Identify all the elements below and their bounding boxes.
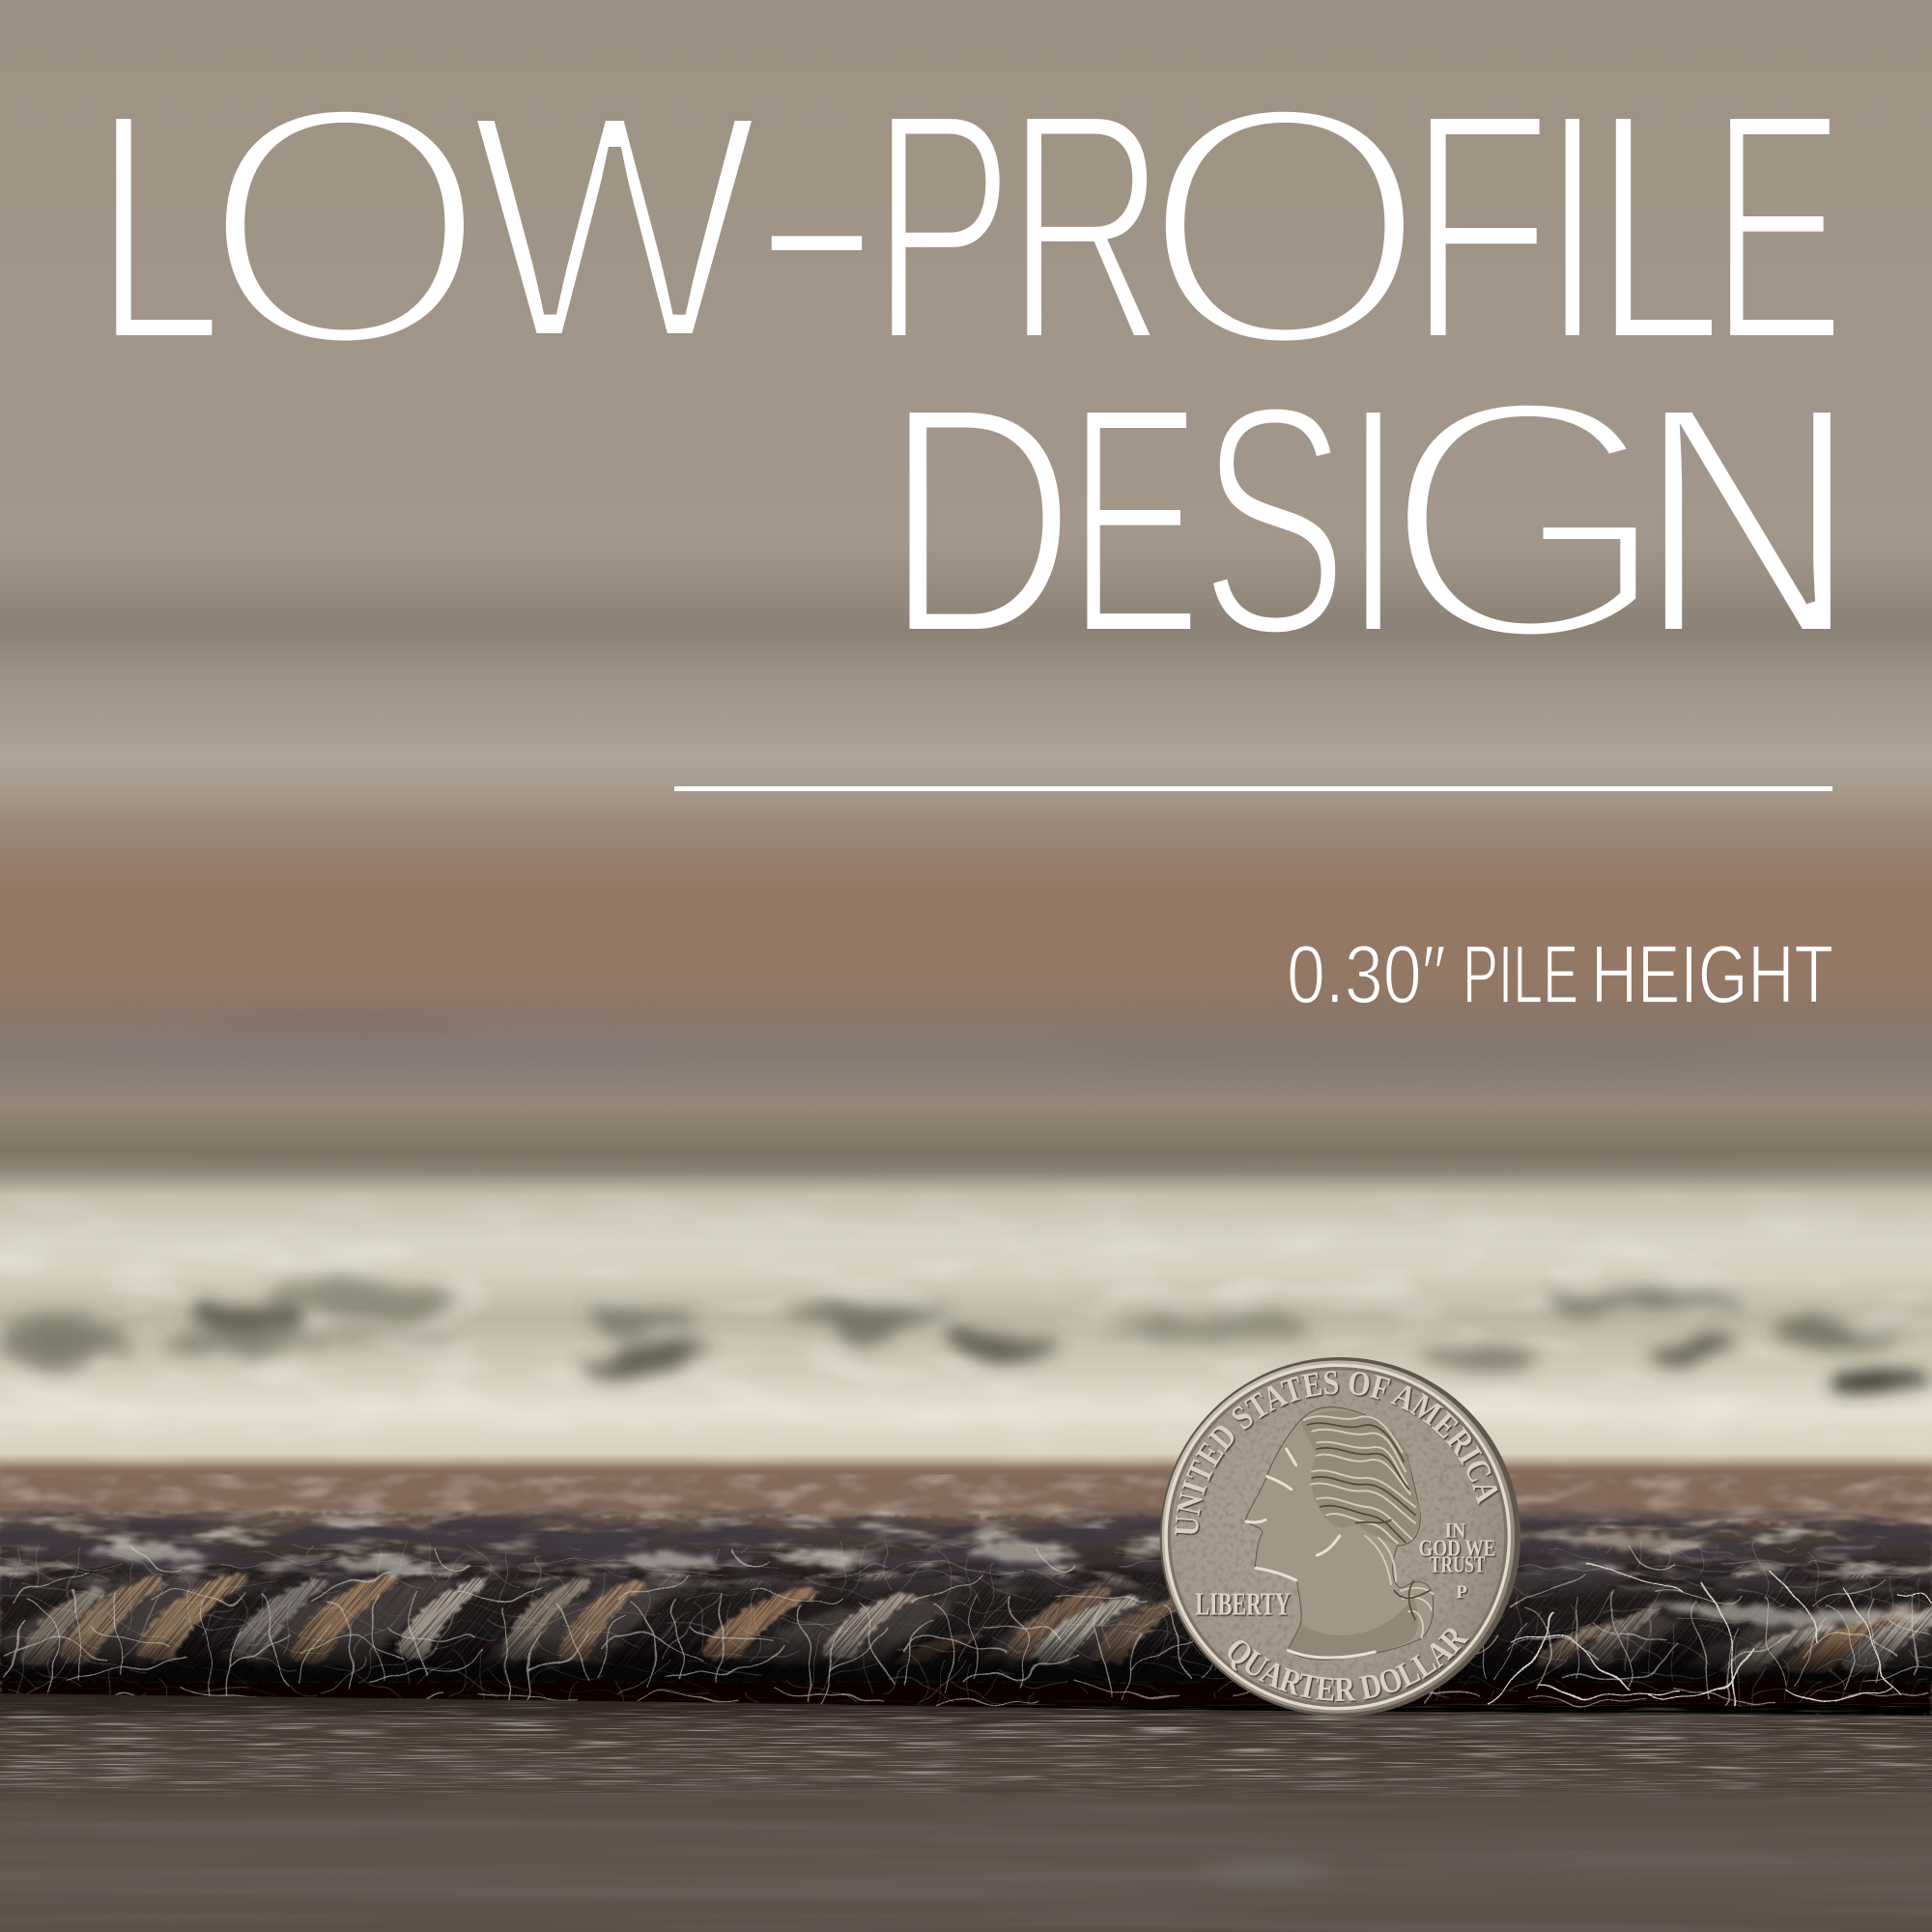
coin inscriptions: GOD WE xyxy=(1418,1537,1495,1562)
light fibre highlights xyxy=(87,1532,1932,1626)
braided rope edge of the rug xyxy=(0,1502,1932,1718)
subheading: pile height: 0.30″ xyxy=(1287,929,1446,1021)
title line 1: - xyxy=(745,34,889,401)
title line 1: F xyxy=(1407,43,1552,411)
title: LOW-PROFILE DESIGN xyxy=(94,33,1861,712)
title line 1: I xyxy=(1543,43,1603,411)
second layer of stray fibres xyxy=(0,1546,1932,1700)
title line 1: R xyxy=(1006,43,1167,411)
coin inscriptions xyxy=(1195,1519,1495,1623)
title line 2: I xyxy=(1343,337,1404,704)
rug pattern: blurred dark motifs xyxy=(0,1286,1932,1397)
title line 2: G xyxy=(1380,327,1672,712)
coin inscriptions: P xyxy=(1456,1582,1467,1603)
coin inscriptions: LIBERTY xyxy=(1195,1587,1291,1623)
broad grey strand masses xyxy=(0,1582,1932,1666)
strand bottom shading xyxy=(0,1584,1932,1681)
twisted strands xyxy=(19,1574,1932,1676)
title line 2: N xyxy=(1635,337,1861,704)
title line 1: P xyxy=(871,43,1014,411)
coin lettering around rim xyxy=(1175,1371,1499,1703)
wood floor xyxy=(0,1693,1932,1932)
subheading: pile height: HEIGHT xyxy=(1591,929,1833,1021)
title line 1: O xyxy=(200,33,490,418)
upper braid: mottled grey wool xyxy=(0,1502,1932,1599)
bust shading xyxy=(1288,1597,1418,1659)
title line 2: E xyxy=(1067,337,1202,704)
divider rule xyxy=(674,786,1833,791)
title line 1: O xyxy=(1140,33,1430,418)
coin lettering around rim: QUARTER DOLLAR xyxy=(1228,1629,1470,1703)
stray fibres xyxy=(0,1536,1932,1710)
coin inscriptions: IN xyxy=(1444,1519,1465,1543)
coin disc xyxy=(1160,1357,1520,1717)
title line 1: L xyxy=(1594,43,1722,411)
subheading: pile height: PILE xyxy=(1463,929,1578,1021)
bust of George Washington xyxy=(1245,1407,1434,1660)
facial highlights xyxy=(1246,1449,1375,1658)
title line 2: D xyxy=(884,337,1077,704)
hair xyxy=(1301,1411,1420,1544)
title line 1: L xyxy=(94,43,223,411)
icon: quarter dollar coin xyxy=(1159,1357,1520,1717)
background photo: blurred rug and wall bands xyxy=(0,582,1932,1716)
coin inscriptions: TRUST xyxy=(1430,1553,1485,1578)
title line 1: W xyxy=(468,43,764,411)
title line 2: S xyxy=(1199,337,1349,704)
brown border stripe of the rug xyxy=(0,1468,1932,1536)
title line 1: E xyxy=(1711,43,1845,411)
right-side fuzzy hairs xyxy=(1488,1565,1932,1710)
fibre streaks over strands xyxy=(0,1575,1932,1681)
coin lettering around rim: UNITED STATES OF AMERICA xyxy=(1175,1371,1499,1537)
